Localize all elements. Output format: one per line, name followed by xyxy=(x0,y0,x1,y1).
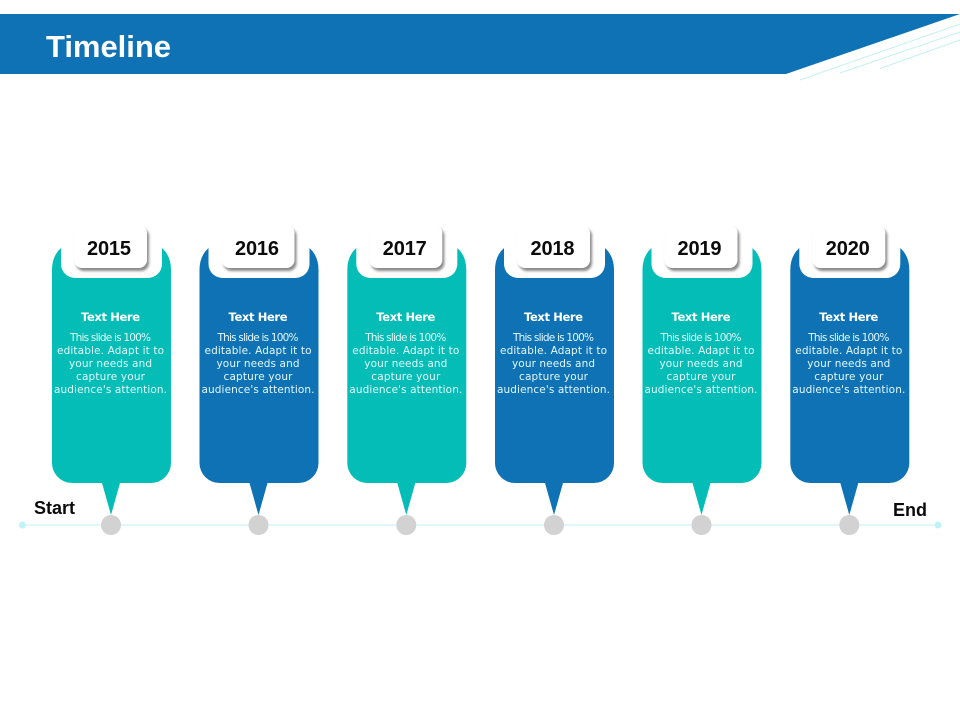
card: 2020: editable. Adapt it to xyxy=(795,345,902,357)
card: 2017: audience's attention. xyxy=(349,384,462,396)
card: 2015: editable. Adapt it to xyxy=(57,345,164,357)
card: 2018: your needs and xyxy=(512,358,595,370)
card: 2020: Text Here xyxy=(819,310,878,324)
card: 2018: This slide is 100% xyxy=(512,332,594,344)
card: 2015: audience's attention. xyxy=(54,384,167,396)
timeline axis xyxy=(19,522,942,528)
card: 2018: capture your xyxy=(519,371,589,383)
card: 2017: This slide is 100% xyxy=(364,332,446,344)
card: 2015: your needs and xyxy=(69,358,152,370)
card: 2020: your needs and xyxy=(807,358,890,370)
card: 2016: Text Here xyxy=(228,310,288,324)
title: Timeline xyxy=(46,29,171,64)
card: 2019: Text Here xyxy=(672,310,731,324)
header banner xyxy=(0,14,960,80)
card: 2018: 2018 xyxy=(530,238,574,260)
card: 2017: your needs and xyxy=(364,358,447,370)
card: 2020: 2020 xyxy=(826,238,870,260)
card: 2018: audience's attention. xyxy=(497,384,610,396)
card: 2020: audience's attention. xyxy=(792,384,905,396)
card: 2019: audience's attention. xyxy=(644,384,758,396)
card: 2016: 2016 xyxy=(235,238,279,260)
label: end: End xyxy=(893,500,927,520)
card: 2016 xyxy=(200,225,318,535)
card: 2017: editable. Adapt it to xyxy=(352,345,459,357)
card: 2015: 2015 xyxy=(87,238,131,260)
card: 2016: This slide is 100% xyxy=(216,332,299,344)
card: 2015 xyxy=(52,225,171,535)
card: 2016: editable. Adapt it to xyxy=(204,345,312,357)
card: 2019: editable. Adapt it to xyxy=(648,345,754,357)
card: 2017 xyxy=(347,225,466,535)
label: start: Start xyxy=(34,498,75,518)
card: 2019: capture your xyxy=(666,371,736,383)
card: 2015: capture your xyxy=(76,371,146,383)
card: 2016: audience's attention. xyxy=(202,384,314,396)
card: 2019: your needs and xyxy=(660,358,742,370)
card: 2020: capture your xyxy=(814,371,884,383)
card: 2018: editable. Adapt it to xyxy=(500,345,607,357)
card: 2018: Text Here xyxy=(524,310,583,324)
card: 2018 xyxy=(495,225,614,535)
card: 2016: capture your xyxy=(224,371,293,383)
card: 2016: your needs and xyxy=(216,358,300,370)
card: 2017: 2017 xyxy=(383,238,427,260)
card: 2015: Text Here xyxy=(81,310,140,324)
card: 2020: This slide is 100% xyxy=(807,332,889,344)
card: 2019: This slide is 100% xyxy=(660,332,742,344)
card: 2017: capture your xyxy=(371,371,441,383)
card: 2020 xyxy=(790,225,909,535)
card: 2019: 2019 xyxy=(678,238,722,260)
card: 2017: Text Here xyxy=(376,310,435,324)
card: 2019 xyxy=(642,225,762,535)
card: 2015: This slide is 100% xyxy=(69,332,151,344)
